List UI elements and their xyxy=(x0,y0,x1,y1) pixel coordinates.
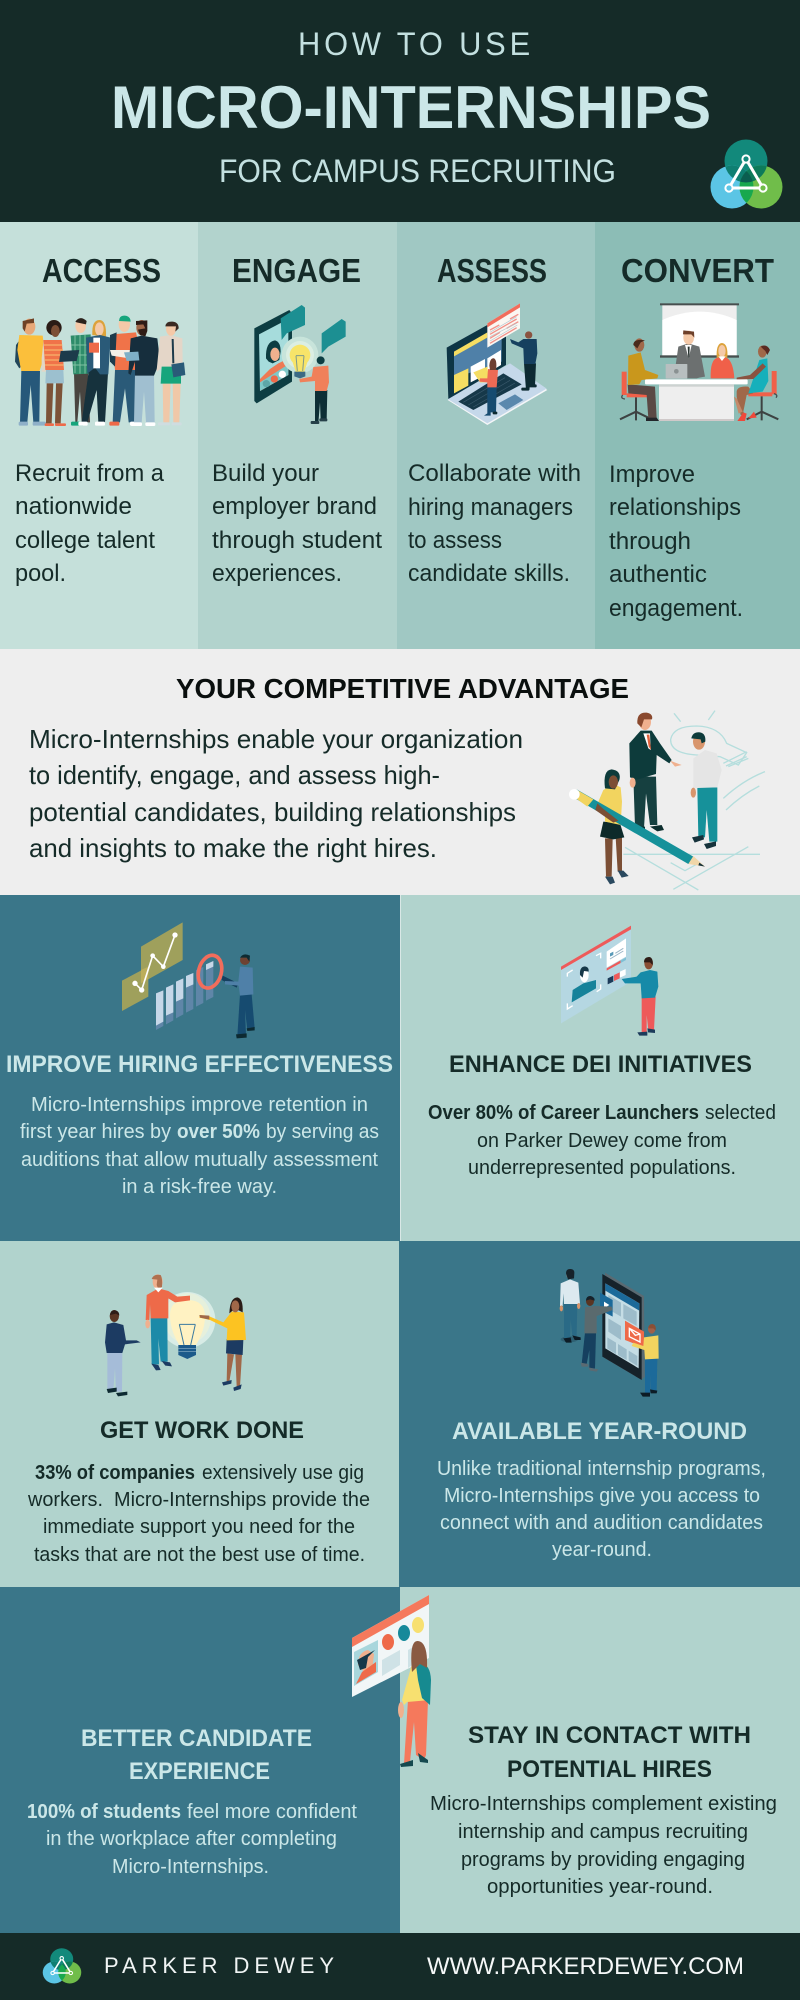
illustration: group of students xyxy=(15,316,185,426)
panel: improve hiring effectiveness xyxy=(0,895,401,1241)
heading: available year-round: AVAILABLE YEAR-ROUND xyxy=(452,1418,747,1445)
panel: enhance dei initiatives xyxy=(401,895,800,1241)
illustration: people around a lightbulb xyxy=(105,1274,246,1396)
text block: access description: college talent xyxy=(15,527,155,554)
text block: dei description: on Parker Dewey come from xyxy=(477,1130,727,1152)
text block: advantage description: potential candidates, building relationships xyxy=(29,797,516,827)
illustration: candidate profile screen xyxy=(561,926,658,1036)
text block: dei description: Over 80% of Career Launchers xyxy=(428,1102,699,1124)
text block: improve hiring description: over 50% xyxy=(177,1121,260,1143)
heading: convert: CONVERT xyxy=(621,252,774,289)
panel: stay in contact xyxy=(400,1587,800,1933)
text block: stay in contact description: opportunities year-round. xyxy=(487,1876,713,1898)
text block: convert description: authentic xyxy=(609,561,707,588)
panel: available year-round xyxy=(399,1241,800,1587)
text block: convert description xyxy=(609,461,743,622)
text block: improve hiring description xyxy=(20,1094,379,1198)
icon: footer logo xyxy=(43,1948,81,1983)
text block: access description: pool. xyxy=(15,560,66,587)
text block: advantage description xyxy=(29,724,523,863)
text block: available year-round description: Micro-Internships give you access to xyxy=(444,1485,760,1507)
text block: dei description: selected xyxy=(705,1102,776,1124)
text block: get work done description: 33% of companies xyxy=(35,1462,195,1484)
text block: better candidate description: 100% of students xyxy=(27,1801,181,1823)
illustration: laptop and two people xyxy=(447,303,547,425)
heading: stay in contact with potential hires: STAY IN CONTACT WITH xyxy=(468,1722,751,1749)
icon: parker dewey logo xyxy=(710,140,782,208)
text block: engage description xyxy=(212,460,382,587)
text block: access description xyxy=(15,460,165,587)
illustration: team building a phone app xyxy=(560,1269,659,1397)
text block: improve hiring description: in a risk-free way. xyxy=(122,1176,277,1198)
panel: assess xyxy=(397,222,595,649)
text block: convert description: engagement. xyxy=(609,595,743,622)
illustration: three people and a giant pencil xyxy=(569,711,765,890)
text block: better candidate description: in the workplace after completing xyxy=(46,1828,337,1850)
text block: better candidate description: Micro-Internships. xyxy=(112,1856,269,1878)
text block: get work done description: extensively use gig xyxy=(202,1462,364,1484)
subtitle: for campus recruiting: FOR CAMPUS RECRUITING xyxy=(219,153,616,189)
illustration: student reading a board xyxy=(352,1595,431,1767)
panel: get work done xyxy=(0,1241,399,1587)
illustration: meeting around a table xyxy=(620,303,778,421)
text block: improve hiring description: auditions that allow mutually assessment xyxy=(21,1149,378,1171)
heading: stay in contact with potential hires: POTENTIAL HIRES xyxy=(507,1756,712,1783)
heading: stay in contact with potential hires xyxy=(468,1722,751,1783)
text block: assess description: hiring managers xyxy=(408,494,573,521)
heading: enhance dei initiatives: ENHANCE DEI INITIATIVES xyxy=(449,1051,752,1078)
panel: better candidate experience xyxy=(0,1587,400,1933)
heading: better candidate experience: BETTER CANDIDATE xyxy=(81,1725,312,1752)
text block: dei description xyxy=(428,1102,776,1179)
panel: your competitive advantage xyxy=(0,649,800,895)
panel: convert xyxy=(595,222,800,649)
text block: access description: Recruit from a xyxy=(15,460,165,487)
text block: stay in contact description: internship and campus recruiting xyxy=(458,1821,748,1843)
text block: better candidate description xyxy=(27,1801,357,1878)
text block: better candidate description: feel more confident xyxy=(187,1801,357,1823)
heading: engage: ENGAGE xyxy=(232,252,361,289)
footer brand name: PARKER DEWEY xyxy=(104,1953,334,1978)
heading: get work done: GET WORK DONE xyxy=(100,1417,304,1444)
heading: access: ACCESS xyxy=(42,252,161,289)
text block: improve hiring description: first year hires by xyxy=(20,1121,171,1143)
text block: advantage description: Micro-Internships enable your organization xyxy=(29,724,523,754)
text block: engage description: employer brand xyxy=(212,493,377,520)
text block: stay in contact description xyxy=(430,1793,777,1898)
heading: your competitive advantage: YOUR COMPETITIVE ADVANTAGE xyxy=(176,673,629,704)
text block: get work done description: workers. Micro-Internships provide the xyxy=(27,1489,370,1511)
panel: header xyxy=(114,32,782,208)
text block: dei description: underrepresented populations. xyxy=(468,1157,736,1179)
text block: advantage description: and insights to make the right hires. xyxy=(29,833,437,863)
text block: advantage description: to identify, engage, and assess high- xyxy=(29,760,440,790)
text block: get work done description: immediate support you need for the xyxy=(43,1516,355,1538)
text block: get work done description: tasks that are not the best use of time. xyxy=(34,1544,365,1566)
panel: engage xyxy=(198,222,397,649)
text block: available year-round description: year-round. xyxy=(552,1539,652,1561)
heading: better candidate experience xyxy=(81,1725,312,1785)
title: how to use: HOW TO USE xyxy=(298,26,534,62)
footer website: WWW.PARKERDEWEY.COM xyxy=(427,1953,744,1980)
panel: footer xyxy=(42,1948,742,1984)
heading: better candidate experience: EXPERIENCE xyxy=(129,1758,270,1785)
panel: access xyxy=(0,222,198,649)
text block: available year-round description xyxy=(437,1458,766,1561)
text block: assess description xyxy=(408,460,581,587)
title: micro-internships: MICRO-INTERNSHIPS xyxy=(111,74,711,141)
heading: improve hiring effectiveness: IMPROVE HIRING EFFECTIVENESS xyxy=(6,1051,393,1078)
text block: get work done description xyxy=(27,1462,370,1566)
text block: engage description: Build your xyxy=(212,460,319,487)
text block: assess description: Collaborate with xyxy=(408,460,581,487)
illustration: chart and magnifier xyxy=(122,922,255,1038)
text block: convert description: through xyxy=(609,528,691,555)
text block: stay in contact description: Micro-Internships complement existing xyxy=(430,1793,777,1815)
illustration: phone, bulb and person xyxy=(254,305,346,424)
text block: engage description: experiences. xyxy=(212,560,342,587)
heading: assess: ASSESS xyxy=(437,252,547,289)
text block: available year-round description: Unlike traditional internship programs, xyxy=(437,1458,766,1480)
text block: assess description: candidate skills. xyxy=(408,560,570,587)
text block: assess description: to assess xyxy=(408,527,502,554)
text block: stay in contact description: programs by providing engaging xyxy=(461,1849,745,1871)
text block: convert description: Improve xyxy=(609,461,695,488)
text block: convert description: relationships xyxy=(609,494,741,521)
text block: improve hiring description: Micro-Internships improve retention in xyxy=(31,1094,368,1116)
text block: improve hiring description: by serving as xyxy=(266,1121,379,1143)
text block: access description: nationwide xyxy=(15,493,132,520)
text block: engage description: through student xyxy=(212,527,382,554)
text block: available year-round description: connect with and audition candidates xyxy=(440,1512,763,1534)
